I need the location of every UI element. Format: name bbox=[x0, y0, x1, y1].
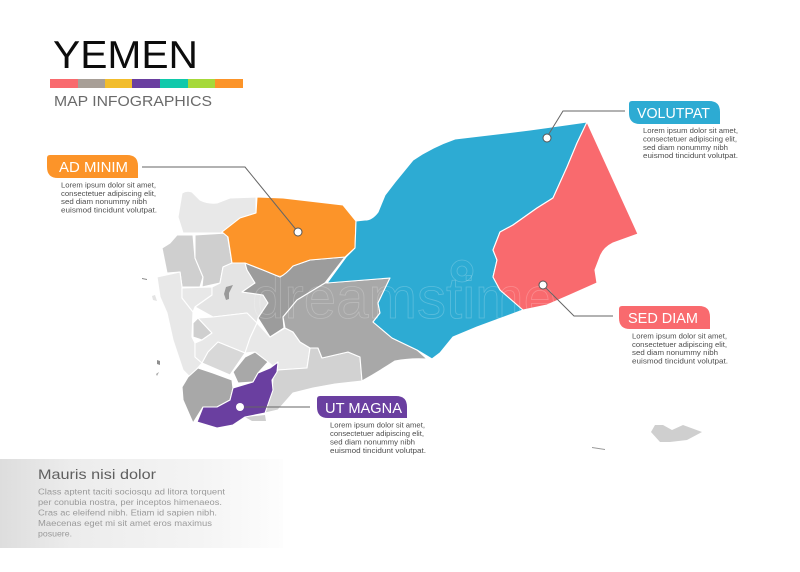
body text: consectetuer adipiscing elit, bbox=[330, 429, 424, 438]
panel body bbox=[38, 486, 226, 538]
leader line bbox=[543, 285, 613, 316]
region: Ad Minim orange bbox=[222, 197, 356, 277]
body text: Lorem ipsum dolor sit amet, bbox=[643, 126, 738, 135]
body text: euismod tincidunt volutpat. bbox=[632, 356, 728, 366]
panel body: Class aptent taciti sociosqu ad litora torquent bbox=[38, 486, 226, 496]
region: north light bbox=[178, 191, 256, 233]
panel background bbox=[0, 459, 283, 548]
region: Amran bbox=[195, 233, 232, 287]
region: Sanaa bbox=[195, 263, 268, 323]
body text: consectetuer adipiscing elit, bbox=[632, 340, 727, 349]
body text: Lorem ipsum dolor sit amet, bbox=[61, 180, 156, 190]
region: small coastal fragment bbox=[245, 415, 266, 421]
body text bbox=[61, 180, 157, 214]
body text: sed diam nonummy nibh bbox=[643, 143, 728, 152]
region: Abyan bbox=[265, 348, 362, 413]
region: Dhamar bbox=[195, 313, 257, 363]
tag text: UT MAGNA bbox=[325, 400, 402, 417]
panel body: posuere. bbox=[38, 528, 72, 538]
watermark: dreamstime bbox=[252, 266, 556, 331]
body text: euismod tincidunt volutpat. bbox=[61, 206, 157, 214]
body text bbox=[643, 126, 738, 160]
tag bbox=[629, 101, 720, 124]
marker dot bbox=[236, 403, 244, 411]
body text: sed diam nonummy nibh bbox=[330, 438, 415, 446]
tag bbox=[317, 396, 407, 418]
title: YEMEN bbox=[53, 34, 198, 77]
panel heading: Mauris nisi dolor bbox=[38, 466, 156, 482]
callout: Sed Diam bbox=[539, 281, 728, 366]
panel body: Cras ac eleifend nibh. Etiam id sapien nibh. bbox=[38, 508, 217, 518]
region: Ibb bbox=[202, 342, 245, 375]
callout: Ut Magna bbox=[236, 396, 426, 455]
marker dot bbox=[543, 134, 551, 142]
tag text: AD MINIM bbox=[59, 159, 128, 176]
region: Ut Magna purple bbox=[197, 362, 278, 428]
region: Hajjah bbox=[162, 235, 203, 287]
body text bbox=[330, 420, 426, 455]
subtitle: MAP INFOGRAPHICS bbox=[54, 94, 212, 110]
region: Mahwit bbox=[182, 287, 212, 312]
colour bar bbox=[50, 79, 243, 88]
panel: notes bbox=[0, 459, 283, 548]
region: Shabwa bbox=[283, 278, 427, 381]
body text: euismod tincidunt volutpat. bbox=[643, 151, 738, 160]
leader line bbox=[547, 111, 625, 137]
body text: consectetuer adipiscing elit, bbox=[643, 134, 737, 144]
region: Dhale bbox=[233, 352, 268, 383]
callout: Volutpat bbox=[543, 101, 738, 160]
panel body: Maecenas eget mi sit amet eros maximus bbox=[38, 518, 212, 528]
body text: sed diam nonummy nibh bbox=[632, 348, 718, 357]
body text: sed diam nonummy nibh bbox=[61, 197, 147, 206]
region: Volutpat blue bbox=[327, 122, 587, 359]
region: middle dark bbox=[242, 257, 345, 337]
region: Raymah bbox=[193, 318, 212, 340]
tag bbox=[619, 306, 710, 329]
region: Taiz bbox=[182, 368, 233, 423]
panel body: per conubia nostra, per inceptos himenaeos. bbox=[38, 497, 222, 507]
small islands bbox=[142, 278, 605, 450]
leader line bbox=[142, 167, 298, 232]
body text: Lorem ipsum dolor sit amet, bbox=[330, 420, 425, 430]
tag bbox=[47, 155, 138, 178]
map of Yemen bbox=[142, 122, 702, 450]
body text: consectetuer adipiscing elit, bbox=[61, 189, 156, 198]
body text bbox=[632, 332, 728, 366]
region: Al Bayda bbox=[245, 323, 310, 370]
body text: Lorem ipsum dolor sit amet, bbox=[632, 332, 727, 340]
region: Sed Diam red bbox=[493, 122, 638, 310]
tag text: VOLUTPAT bbox=[637, 105, 710, 122]
marker dot bbox=[294, 228, 302, 236]
region: Sanaa city bbox=[224, 285, 233, 300]
region: Hodeidah bbox=[157, 272, 202, 377]
tag text: SED DIAM bbox=[628, 310, 698, 327]
body text: euismod tincidunt volutpat. bbox=[330, 446, 426, 455]
island: Socotra bbox=[651, 425, 702, 442]
leader line bbox=[240, 406, 310, 408]
marker dot bbox=[539, 281, 547, 289]
callout: Ad Minim bbox=[47, 155, 302, 236]
